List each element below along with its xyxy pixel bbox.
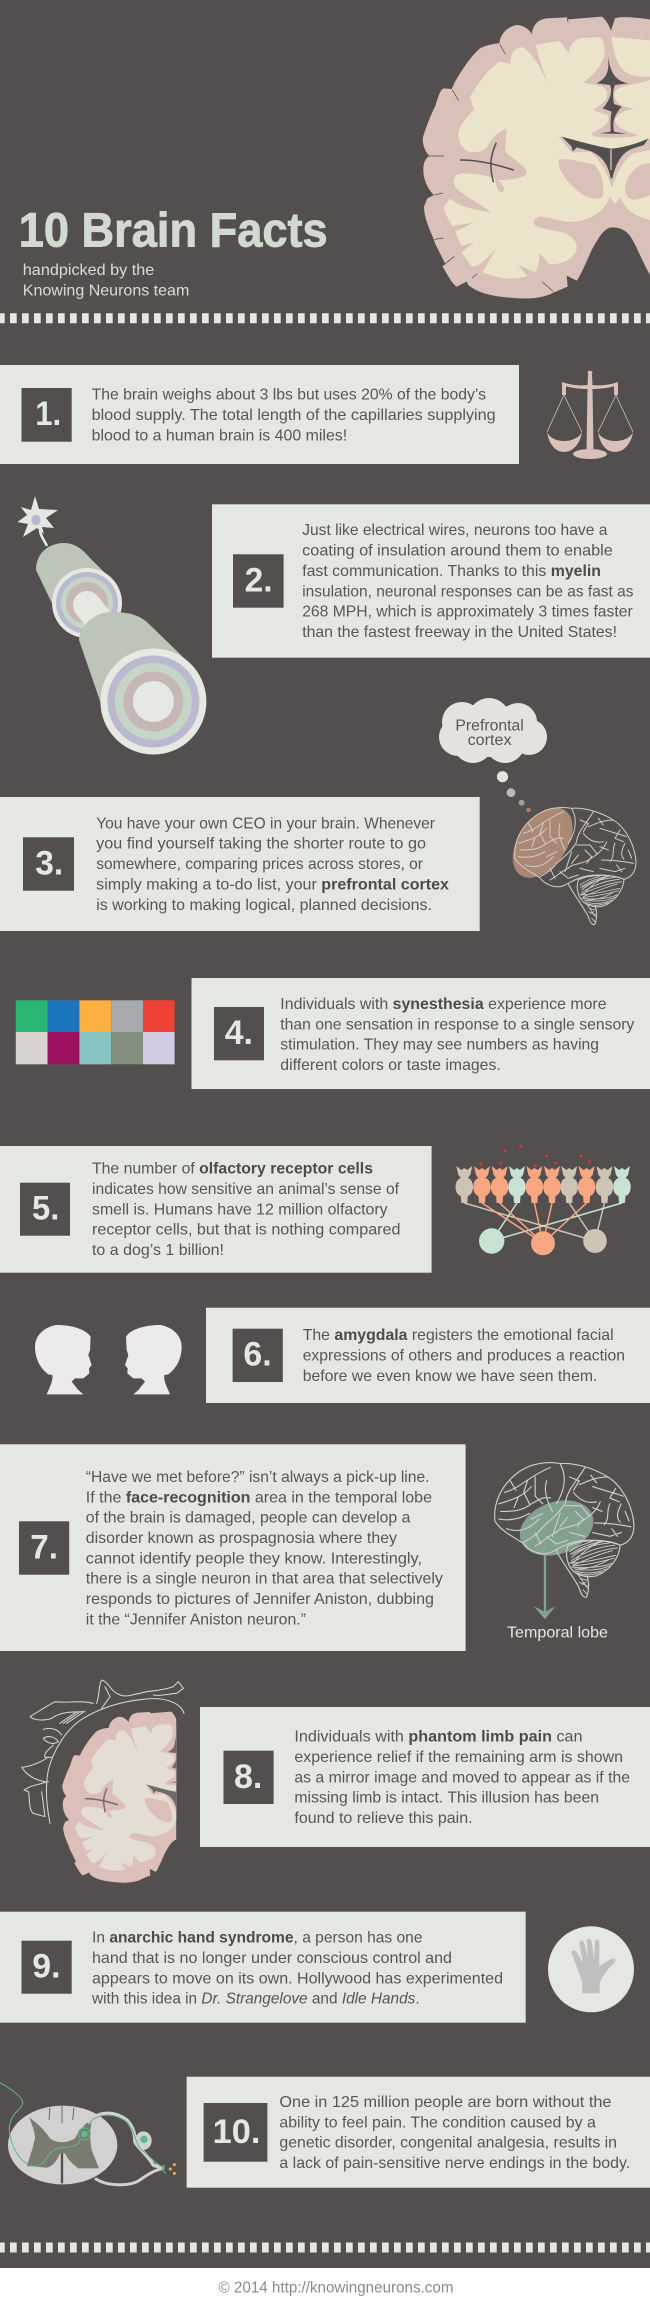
panel background 2 [212,504,650,658]
fact 6 text: The amygdala registers the emotional facial [303,1327,614,1344]
fact 2 text: 268 MPH, which is approximately 3 times faster [302,604,633,621]
icon: spinal cord pain pathway [0,2083,176,2185]
number 9: 9. [32,1948,60,1986]
fact 1 text: blood supply. The total length of the capillaries supplying [92,407,496,424]
thought cloud: prefrontal cortex: cortex [468,732,512,749]
number 7: 7. [30,1529,58,1567]
fact 2 text: coating of insulation around them to enable [302,542,613,559]
panel: fact 8 [200,1707,650,1847]
panel background 1 [0,365,519,464]
fact 4 text: stimulation. They may see numbers as having [280,1037,599,1054]
fact 7 text: of the brain is damaged, people can develop a [86,1510,411,1527]
fact 3 text: you find yourself taking the shorter route to go [96,836,426,853]
fact 7 text: cannot identify people they know. Interestingly, [86,1550,422,1567]
subtitle: Knowing Neurons team [23,282,189,300]
fact 4 text: different colors or taste images. [280,1057,501,1074]
fact 8 text: missing limb is intact. This illusion has been [294,1790,599,1807]
number 1: 1. [35,395,61,433]
footer credit: © 2014 http://knowingneurons.com [218,2280,454,2297]
panel: fact 4 [192,978,650,1089]
fact 9 text [91,1930,503,2008]
panel: fact 3 [0,797,480,931]
fact 2 text [302,522,634,641]
icon: brain with temporal lobe highlighted [495,1463,634,1619]
fact 5 text: to a dog’s 1 billion! [92,1242,224,1259]
fact 8 text: Individuals with phantom limb pain can [294,1729,582,1746]
icon: child face silhouettes [35,1325,182,1394]
icon: brain with prefrontal cortex highlighted [500,797,636,925]
panel: fact 6 [206,1308,650,1403]
panel background 3 [0,797,480,931]
fact 10 text: genetic disorder, congenital analgesia, results in [279,2135,617,2152]
icon: myelinated axon with neuron [17,496,206,754]
number 10 [204,2103,267,2162]
number 5 [20,1183,70,1236]
number 6 [233,1329,283,1382]
number 2: 2. [245,562,273,600]
fact 9 text: appears to move on its own. Hollywood has experimented [92,1970,503,1987]
fact 10 text: ability to feel pain. The condition caused by a [279,2114,596,2131]
number 9 [22,1941,72,1994]
fact 3 text: somewhere, comparing prices across stores, or [96,856,424,873]
fact 7 text [86,1469,443,1628]
panel: fact 9 [0,1912,526,2023]
fact 4 text: than one sensation in response to a single sensory [280,1016,634,1033]
number 8 [224,1751,274,1804]
number 3 [23,837,74,891]
fact 2 text: than the fastest freeway in the United States! [302,624,617,641]
fact 2 text: insulation, neuronal responses can be as fast as [302,583,634,600]
fact 6 text: expressions of others and produces a reaction [303,1348,625,1365]
title: 10 Brain Facts [19,205,328,258]
fact 5 text: smell is. Humans have 12 million olfactory [92,1201,388,1218]
fact 3 text: is working to making logical, planned decisions. [96,897,432,914]
fact 7 text: responds to pictures of Jennifer Aniston, dubbing [86,1591,434,1608]
icon: hand in circle [548,1926,634,2012]
top dashed divider [0,313,650,323]
bottom dashed divider [0,2242,650,2252]
number 3: 3. [35,845,63,883]
panel: fact 2 [212,504,650,658]
fact 1 text [92,386,496,444]
fact 7 text: it the “Jennifer Aniston neuron.” [86,1611,306,1628]
number 6: 6. [243,1336,272,1374]
panel background 4 [192,978,650,1089]
label: temporal lobe: Temporal lobe [507,1625,608,1642]
subtitle: handpicked by the [23,262,154,279]
fact 10 text [279,2094,630,2172]
fact 5 text: receptor cells, but that is nothing compared [92,1222,400,1239]
fact 2 text: Just like electrical wires, neurons too have a [302,522,607,539]
subtitle [23,262,189,300]
number 4: 4. [225,1014,253,1052]
number 4 [214,1007,264,1060]
panel background 9 [0,1912,526,2023]
panel background 6 [206,1308,650,1403]
fact 9 text: In anarchic hand syndrome, a person has one [92,1930,423,1947]
thought cloud: prefrontal cortex: Prefrontal [455,718,524,735]
fact 7 text: there is a single neuron in that area that selectively [86,1571,443,1588]
fact 8 text: found to relieve this pain. [294,1810,473,1827]
panel: fact 1 [0,365,519,464]
panel background 5 [0,1146,432,1273]
number 2 [233,554,284,608]
fact 5 text [92,1160,400,1259]
icon: synesthesia colour grid [16,1000,175,1064]
number 1 [22,388,72,442]
icon: homunculus over half brain [22,1680,202,1883]
fact 7 text: If the face-recognition area in the temporal lobe [86,1489,432,1506]
fact 8 text: as a mirror image and moved to appear as if the [294,1769,630,1786]
panel: fact 5 [0,1146,432,1273]
fact 8 text [294,1729,630,1827]
icon: balance scale [547,371,633,459]
panel background 7 [0,1444,466,1651]
fact 3 text: You have your own CEO in your brain. Whenever [96,815,436,832]
fact 10 text: a lack of pain-sensitive nerve endings in the body. [279,2155,630,2172]
panel background 8 [200,1707,650,1847]
fact 6 text: before we even know we have seen them. [303,1368,597,1385]
number 8: 8. [234,1758,262,1796]
fact 5 text: indicates how sensitive an animal’s sense of [92,1181,400,1198]
fact 1 text: The brain weighs about 3 lbs but uses 20% of the body’s [92,386,486,404]
icon: olfactory receptor cells [456,1145,631,1255]
fact 10 text: One in 125 million people are born without the [279,2094,612,2111]
fact 2 text: fast communication. Thanks to this myelin [302,563,601,580]
icon: coronal brain section [423,17,650,299]
fact 9 text: hand that is no longer under conscious control and [92,1950,452,1967]
number 5: 5. [32,1190,59,1228]
panel: fact 10 [187,2077,650,2188]
panel: fact 7 [0,1444,466,1651]
fact 7 text: disorder known as prospagnosia where they [86,1530,397,1547]
arrow to temporal lobe label [534,1555,556,1619]
thought cloud: prefrontal cortex [439,698,547,812]
fact 8 text: experience relief if the remaining arm is shown [294,1749,623,1766]
fact 3 text: simply making a to-do list, your prefrontal cortex [96,876,449,893]
fact 9 text: with this idea in Dr. Strangelove and Idle Hands. [91,1991,420,2008]
number 10: 10. [213,2113,260,2151]
fact 4 text [280,996,634,1074]
fact 7 text: “Have we met before?” isn’t always a pick-up line. [86,1469,430,1486]
number 7 [19,1521,69,1575]
fact 6 text [303,1327,625,1385]
fact 3 text [96,815,449,914]
fact 5 text: The number of olfactory receptor cells [92,1160,373,1177]
footer strip [0,2268,650,2300]
fact 4 text: Individuals with synesthesia experience more [280,996,607,1013]
panel background 10 [187,2077,650,2188]
fact 1 text: blood to a human brain is 400 miles! [92,428,347,444]
